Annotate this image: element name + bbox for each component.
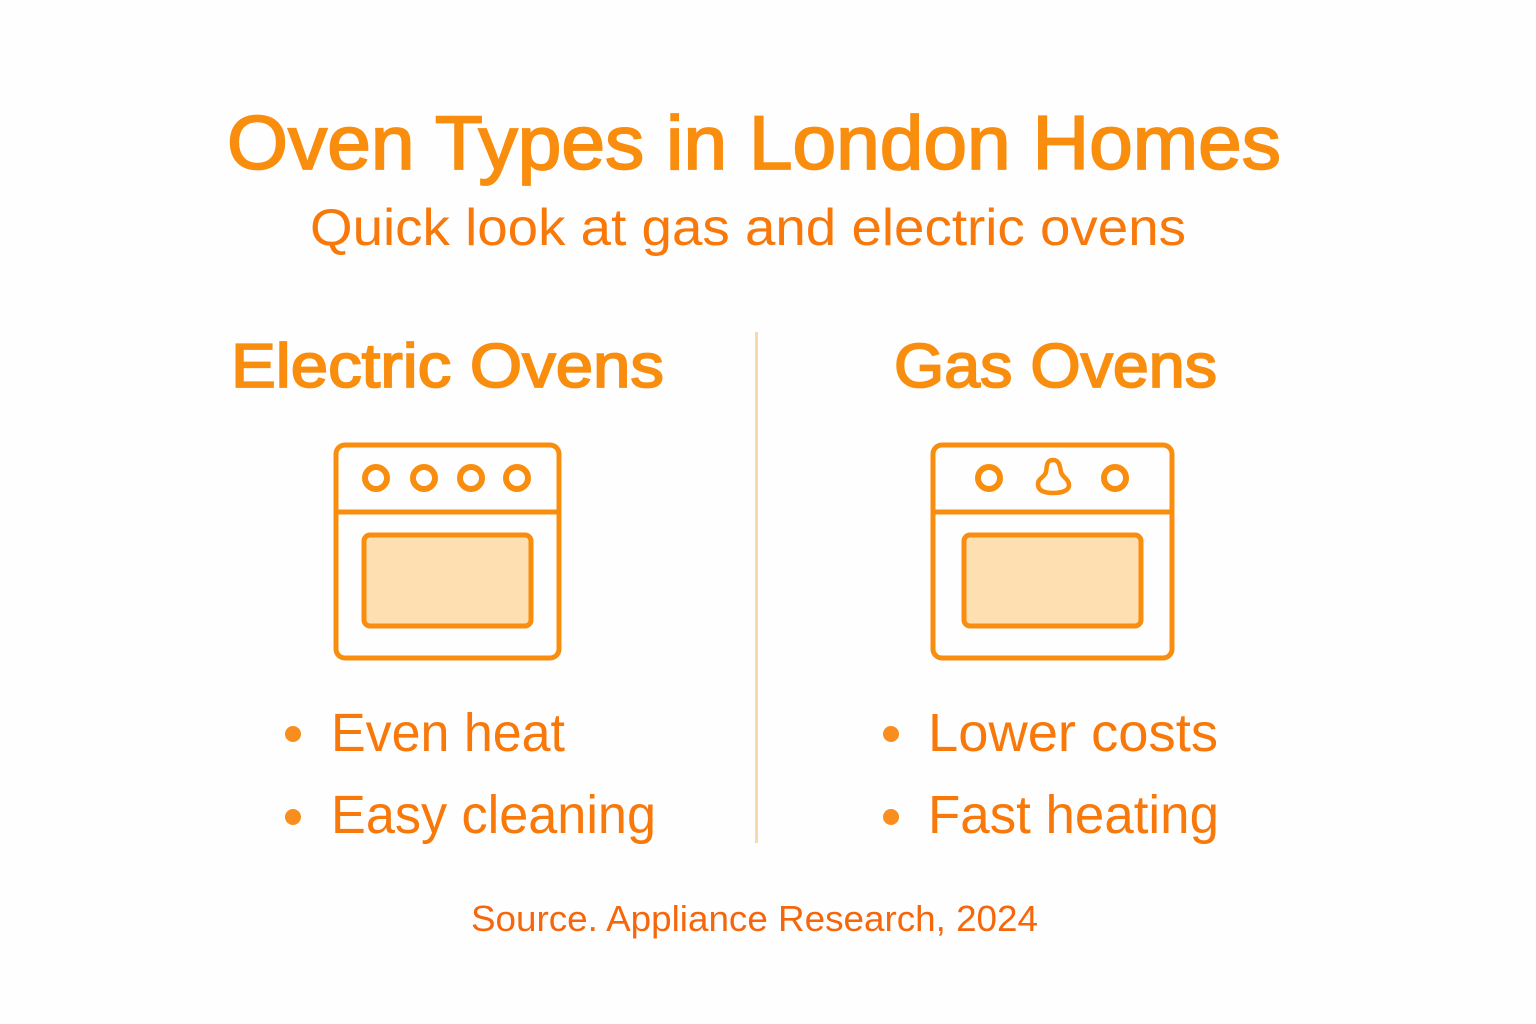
- heading: gas ovens: Gas Ovens: [894, 332, 1217, 401]
- bullet list: gas ovens: Fast heating: [928, 785, 1219, 845]
- panel: electric ovens: [231, 332, 664, 845]
- panel: gas ovens: [883, 332, 1219, 845]
- bullet list: gas ovens: Lower costs: [928, 703, 1218, 763]
- bullet list: electric ovens: Even heat: [331, 703, 565, 763]
- bullet list: electric ovens: [285, 703, 656, 845]
- icon: gas oven: [933, 445, 1172, 658]
- source note: Source. Appliance Research, 2024: [471, 898, 1038, 939]
- icon: electric oven: [336, 445, 559, 658]
- center divider: [755, 332, 758, 843]
- heading: electric ovens: Electric Ovens: [231, 332, 664, 401]
- title: Oven Types in London Homes: [227, 101, 1281, 186]
- subtitle: Quick look at gas and electric ovens: [310, 199, 1186, 257]
- bullet list: electric ovens: Easy cleaning: [331, 785, 656, 845]
- bullet list: gas ovens: [883, 703, 1219, 845]
